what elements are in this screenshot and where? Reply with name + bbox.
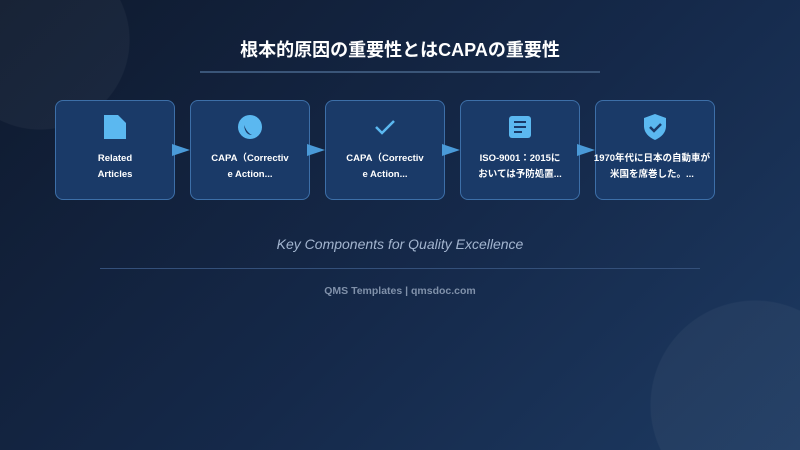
box 5 <box>595 100 715 200</box>
box 1 <box>55 100 175 200</box>
icon: circle <box>238 115 262 139</box>
arrow 3 <box>442 144 460 156</box>
box 1: Articles <box>98 169 132 180</box>
icon: shield <box>644 114 666 140</box>
arrow 4 <box>577 144 595 156</box>
box 3: e Action... <box>362 169 408 180</box>
box 4 <box>460 100 580 200</box>
icon: document <box>104 115 126 139</box>
icon: article <box>509 116 531 138</box>
subtitle: Key Components for Quality Excellence <box>277 236 523 252</box>
box 5: 米国を席巻した。... <box>610 169 694 180</box>
arrow 1 <box>172 144 190 156</box>
box 5: 1970年代に日本の自動車が <box>594 153 710 164</box>
box 1: Related <box>98 153 132 164</box>
box 2: e Action... <box>227 169 273 180</box>
box 3: CAPA（Correctiv <box>346 153 424 164</box>
icon: check <box>375 120 395 135</box>
box 2 <box>190 100 310 200</box>
arrow 2 <box>307 144 325 156</box>
box 4: おいては予防処置... <box>478 169 562 180</box>
footer: QMS Templates | qmsdoc.com <box>324 285 476 297</box>
title: 根本的原因の重要性とはCAPAの重要性 <box>240 40 560 60</box>
box 3 <box>325 100 445 200</box>
box 4: ISO-9001：2015に <box>480 153 560 164</box>
box 2: CAPA（Correctiv <box>211 153 289 164</box>
